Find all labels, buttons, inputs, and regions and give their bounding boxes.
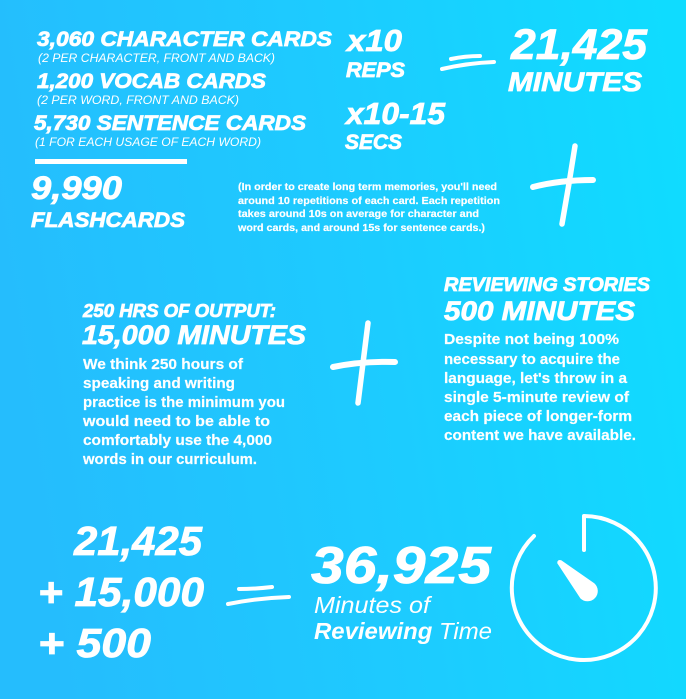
panel: sum	[38, 518, 204, 666]
panel: reviewing stories	[444, 275, 650, 444]
panel: flashcard counts	[31, 28, 332, 232]
icon: equals sign bottom	[228, 587, 289, 604]
total label line 1: Minutes of	[314, 592, 433, 618]
output description: practice is the minimum you	[83, 394, 285, 411]
sum line 2: + 15,000	[38, 569, 204, 615]
character cards heading: 3,060 CHARACTER CARDS	[37, 28, 332, 51]
vocab cards note: (2 PER WORD, FRONT AND BACK)	[37, 93, 239, 107]
sentence cards note: (1 FOR EACH USAGE OF EACH WORD)	[35, 135, 261, 149]
result: 21,425 minutes	[508, 21, 648, 97]
sentence cards heading: 5,730 SENTENCE CARDS	[34, 112, 306, 135]
text block: repetition explanation	[237, 181, 500, 234]
panel: multipliers	[344, 23, 446, 154]
stories description: Despite not being 100%	[444, 331, 619, 348]
text block: repetition explanation: word cards, and around 15s for sentence cards.)	[237, 222, 485, 234]
panel: total	[311, 537, 492, 644]
reps label: REPS	[346, 59, 405, 82]
sum line 1: 21,425	[73, 518, 203, 564]
reps multiplier: x10	[345, 23, 402, 58]
icon: timer	[512, 516, 656, 660]
text block: repetition explanation: (In order to create long term memories, you'll need	[238, 181, 497, 193]
panel: output	[82, 301, 306, 468]
text block: repetition explanation: around 10 repetitions of each card. Each repetition	[238, 195, 500, 207]
icon: equals sign top	[442, 56, 494, 69]
flashcard total label: FLASHCARDS	[31, 209, 185, 232]
stories minutes: 500 MINUTES	[444, 296, 635, 326]
stories description: language, let's throw in a	[444, 370, 628, 387]
icon: plus sign top	[533, 146, 593, 224]
stories description: each piece of longer-form	[444, 408, 632, 425]
output description: comfortably use the 4,000	[83, 432, 272, 449]
stories description: single 5-minute review of	[444, 389, 630, 406]
result: 21,425 minutes: 21,425	[510, 21, 648, 69]
stories description: content we have available.	[444, 427, 636, 444]
seconds label: SECS	[345, 131, 402, 154]
total number: 36,925	[311, 537, 492, 595]
flashcard total number: 9,990	[31, 170, 122, 206]
output description: speaking and writing	[83, 375, 235, 392]
output heading: 250 HRS OF OUTPUT:	[82, 301, 276, 321]
output minutes: 15,000 MINUTES	[82, 320, 306, 350]
output description	[82, 356, 285, 468]
character cards note: (2 PER CHARACTER, FRONT AND BACK)	[38, 51, 275, 65]
output description: words in our curriculum.	[82, 451, 257, 468]
output description: would need to be able to	[82, 413, 270, 430]
seconds multiplier: x10-15	[344, 96, 446, 131]
output description: We think 250 hours of	[83, 356, 244, 373]
icon: plus sign middle	[333, 323, 395, 403]
stories heading: REVIEWING STORIES	[444, 275, 650, 296]
result: 21,425 minutes: MINUTES	[508, 67, 642, 97]
sum line 3: + 500	[38, 620, 151, 666]
total label line 2: Reviewing Time	[314, 618, 492, 644]
stories description	[444, 331, 636, 444]
text block: repetition explanation: takes around 10s on average for character and	[238, 208, 479, 220]
stories description: necessary to acquire the	[444, 351, 620, 368]
vocab cards heading: 1,200 VOCAB CARDS	[37, 70, 266, 93]
